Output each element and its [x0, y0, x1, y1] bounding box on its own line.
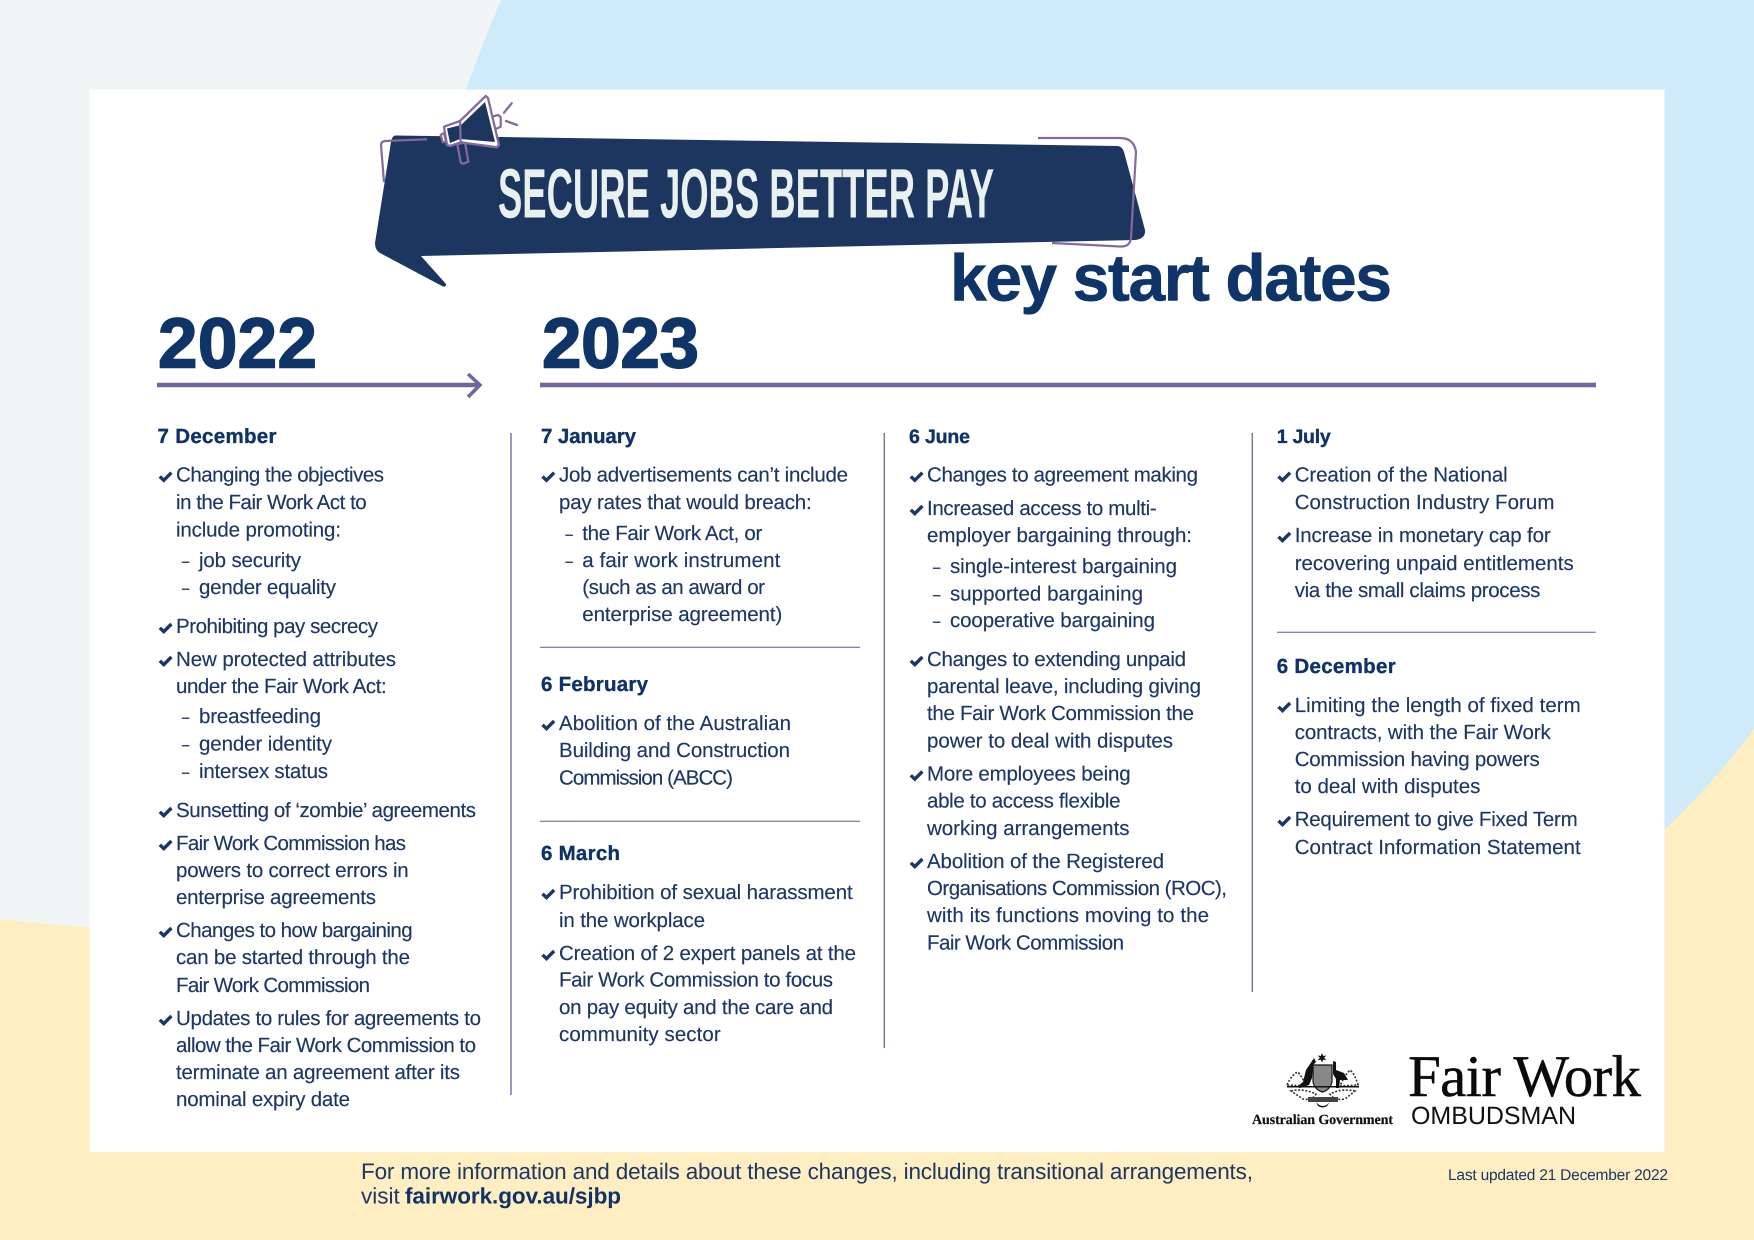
- shield: [1313, 1065, 1332, 1092]
- item: unpaid parental leave: Changes to extending unpaid: [927, 648, 1186, 671]
- item: small claims cap: via the small claims process: [1295, 579, 1540, 602]
- item: ROC abolition: with its functions moving to the: [926, 904, 1209, 927]
- panel: January to March column: [540, 425, 860, 1046]
- item: ROC abolition: [911, 850, 1227, 954]
- background: blue shape: [440, 0, 1754, 1240]
- item: protected attributes: gender identity: [199, 733, 333, 756]
- item: fixed term contracts: contracts, with the Fair Work: [1295, 721, 1551, 744]
- item: objectives: gender equality: [199, 576, 337, 599]
- item: starting bargaining: [160, 919, 413, 997]
- heading: 6 December: 6 December: [1277, 655, 1396, 678]
- item: protected attributes: under the Fair Work Act:: [176, 675, 387, 698]
- item: ROC abolition: Fair Work Commission: [927, 932, 1124, 954]
- wattle foliage: [1287, 1070, 1358, 1099]
- item: protected attributes: [160, 648, 396, 783]
- item: fixed term contracts: Commission having powers: [1295, 748, 1540, 771]
- ribbon: [1308, 1097, 1338, 1102]
- item: correct errors: [160, 832, 409, 909]
- item: protected attributes: –: [182, 737, 190, 752]
- footer: more information: [361, 1159, 1253, 1208]
- item: fixed term contracts: Limiting the length of fixed term: [1295, 694, 1581, 717]
- item: construction forum: Creation of the National: [1295, 464, 1508, 487]
- heading: 7 January: 7 January: [541, 425, 637, 448]
- base line: [1287, 1086, 1359, 1088]
- item: job advertisements: –: [566, 554, 574, 568]
- item: objectives: job security: [198, 549, 302, 572]
- heading: 6 March: 6 March: [541, 842, 620, 865]
- item: small claims cap: recovering unpaid entitlements: [1295, 552, 1574, 575]
- item: fixed term contracts: to deal with disputes: [1295, 775, 1480, 798]
- item: flexible working: More employees being: [927, 762, 1131, 786]
- background: yellow shape: [0, 729, 1754, 1240]
- item: terminating agreements: nominal expiry date: [176, 1088, 350, 1111]
- logo text: Ombudsman: OMBUDSMAN: [1411, 1102, 1576, 1130]
- item: job advertisements: a fair work instrument: [582, 549, 781, 572]
- item: starting bargaining: Fair Work Commission: [176, 974, 370, 997]
- megaphone back tab: [492, 115, 501, 129]
- item: job advertisements: enterprise agreement): [582, 603, 782, 626]
- item: job advertisements: the Fair Work Act, or: [582, 522, 762, 545]
- panel: 7 December column: [158, 425, 481, 1111]
- item: unpaid parental leave: [911, 648, 1201, 752]
- item: flexible working: able to access flexible: [927, 790, 1120, 812]
- item: pay secrecy: Prohibiting pay secrecy: [176, 615, 379, 638]
- item: job advertisements: (such as an award or: [582, 576, 765, 599]
- item: protected attributes: –: [182, 764, 190, 780]
- item: objectives: [160, 464, 384, 599]
- item: protected attributes: –: [182, 710, 190, 724]
- item: multi-employer bargaining: –: [933, 560, 941, 574]
- year heading 2022: 2022: [158, 304, 317, 384]
- item: ABCC abolition: Building and Construction: [559, 739, 790, 762]
- year heading 2023: 2023: [542, 304, 699, 384]
- panel: 6 June column: [909, 426, 1227, 954]
- megaphone navy fill: [447, 102, 495, 143]
- item: correct errors: enterprise agreements: [176, 886, 376, 909]
- item: ROC abolition: Organisations Commission (ROC),: [927, 877, 1227, 900]
- item: information statement: [1278, 808, 1581, 859]
- logo text: Australian Government: Australian Government: [1252, 1113, 1393, 1128]
- item: information statement: Contract Information Statement: [1295, 836, 1581, 859]
- item: agreement making: Changes to agreement making: [927, 464, 1198, 487]
- heading: 1 July: 1 July: [1277, 426, 1331, 448]
- item: unpaid parental leave: power to deal with disputes: [927, 730, 1173, 752]
- item: multi-employer bargaining: –: [933, 587, 941, 602]
- logo: Australian Government crest: [1287, 1053, 1359, 1108]
- item: job advertisements: [542, 464, 848, 626]
- footer: more information: fairwork.gov.au/sjbp: [405, 1184, 621, 1208]
- item: expert panels: on pay equity and the care and: [559, 996, 833, 1019]
- item: unpaid parental leave: parental leave, including giving: [927, 675, 1201, 698]
- item: multi-employer bargaining: supported bargaining: [950, 583, 1143, 606]
- item: sexual harassment: [542, 881, 853, 932]
- item: ABCC abolition: [542, 712, 791, 790]
- panel: July and December column: [1277, 426, 1596, 859]
- title banner: [375, 96, 1145, 287]
- item: objectives: Changing the objectives: [176, 464, 384, 487]
- item: ROC abolition: Abolition of the Registered: [927, 850, 1164, 873]
- item: fixed term contracts: [1278, 694, 1581, 798]
- heading: 7 December: 7 December: [158, 425, 277, 448]
- item: multi-employer bargaining: [911, 497, 1192, 632]
- item: job advertisements: Job advertisements can’t include: [559, 464, 848, 487]
- item: construction forum: [1278, 464, 1554, 514]
- item: information statement: Requirement to give Fixed Term: [1295, 808, 1578, 831]
- item: multi-employer bargaining: Increased access to multi-: [927, 497, 1157, 520]
- item: job advertisements: pay rates that would breach:: [559, 491, 812, 514]
- item: objectives: –: [182, 554, 190, 568]
- star: [1318, 1053, 1326, 1063]
- item: expert panels: Fair Work Commission to focus: [559, 969, 833, 992]
- heading: 6 June: 6 June: [909, 426, 970, 448]
- item: correct errors: powers to correct errors in: [176, 859, 409, 882]
- megaphone body outline: [444, 96, 499, 147]
- item: small claims cap: [1278, 524, 1574, 602]
- item: expert panels: [542, 942, 856, 1046]
- arrow: 2022 timeline: [157, 374, 480, 397]
- item: objectives: in the Fair Work Act to: [176, 491, 367, 514]
- item: expert panels: community sector: [559, 1023, 721, 1046]
- emu: [1333, 1061, 1348, 1088]
- footer: more information: visit: [361, 1184, 400, 1208]
- item: multi-employer bargaining: employer bargaining through:: [927, 524, 1192, 547]
- item: multi-employer bargaining: –: [933, 614, 941, 628]
- banner outline strokes: [381, 138, 1136, 247]
- item: terminating agreements: terminate an agreement after its: [176, 1061, 460, 1084]
- subtitle: key start dates: key start dates: [950, 240, 1392, 314]
- item: ABCC abolition: Commission (ABCC): [559, 766, 733, 790]
- item: terminating agreements: [160, 1007, 481, 1111]
- kangaroo: [1297, 1058, 1316, 1088]
- item: terminating agreements: Updates to rules for agreements to: [176, 1007, 481, 1030]
- megaphone left nub: [441, 133, 446, 142]
- item: protected attributes: breastfeeding: [199, 705, 321, 728]
- item: sexual harassment: in the workplace: [559, 909, 705, 932]
- icon: megaphone: [441, 96, 517, 164]
- item: small claims cap: Increase in monetary cap for: [1295, 524, 1551, 547]
- item: ABCC abolition: Abolition of the Australian: [559, 712, 791, 735]
- item: flexible working: [911, 762, 1131, 840]
- item: protected attributes: New protected attributes: [176, 648, 396, 671]
- banner speech bubble: [375, 136, 1145, 287]
- logo text: Fair Work: Fair Work: [1408, 1043, 1642, 1109]
- item: objectives: –: [182, 580, 190, 596]
- panel: white card: [90, 90, 1664, 1152]
- megaphone handle: [457, 142, 468, 164]
- item: flexible working: working arrangements: [926, 817, 1130, 840]
- footer: last updated: Last updated 21 December 2022: [1448, 1167, 1668, 1184]
- item: sexual harassment: Prohibition of sexual harassment: [559, 881, 853, 904]
- heading: 6 February: 6 February: [541, 673, 649, 696]
- item: objectives: include promoting:: [176, 519, 341, 542]
- item: terminating agreements: allow the Fair Work Commission to: [176, 1034, 476, 1057]
- timeline rule 2023: [540, 383, 1596, 387]
- sprig: [1316, 1102, 1330, 1108]
- item: starting bargaining: can be started through the: [176, 946, 410, 969]
- item: unpaid parental leave: the Fair Work Commission the: [927, 702, 1194, 725]
- item: starting bargaining: Changes to how bargaining: [176, 919, 413, 942]
- item: job advertisements: –: [566, 526, 574, 542]
- item: zombie agreements: Sunsetting of ‘zombie’ agreements: [176, 799, 476, 822]
- item: protected attributes: intersex status: [199, 760, 328, 783]
- item: construction forum: Construction Industry Forum: [1295, 491, 1554, 514]
- footer: more information: For more information and details about these changes, including transitional arrangements,: [361, 1159, 1253, 1184]
- item: multi-employer bargaining: cooperative bargaining: [950, 609, 1155, 632]
- megaphone divider and rays: [460, 103, 517, 142]
- item: expert panels: Creation of 2 expert panels at the: [559, 942, 856, 965]
- item: multi-employer bargaining: single-interest bargaining: [950, 555, 1177, 578]
- banner title text: SECURE JOBS BETTER PAY: [498, 154, 994, 232]
- item: correct errors: Fair Work Commission has: [176, 832, 406, 855]
